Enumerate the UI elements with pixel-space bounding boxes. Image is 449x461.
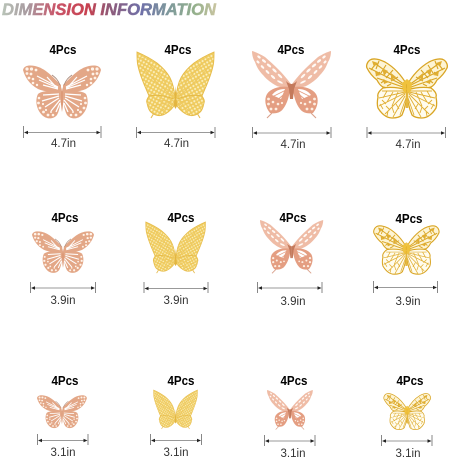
row 3 quantity labels: 4Pcs [396, 373, 424, 388]
row 3 quantity labels: 4Pcs [280, 373, 308, 388]
measure: row 2 column 2 [144, 282, 208, 307]
measure: row 1 column 3 [252, 127, 331, 151]
measure: row 2 column 4: 3.9in [396, 296, 420, 308]
row 1 quantity labels: 4Pcs [50, 42, 76, 57]
measure: row 2 column 1: 3.9in [51, 295, 75, 307]
butterfly: large rose [23, 65, 101, 118]
butterfly: medium rose swallowtail [260, 220, 323, 273]
butterfly: large rose swallowtail [252, 51, 331, 118]
row 2 quantity labels: 4Pcs [52, 210, 78, 225]
measure: row 1 column 1: 4.7in [51, 138, 76, 150]
measure: row 3 column 3 [264, 435, 315, 460]
measure: row 1 column 2: 4.7in [164, 138, 189, 150]
measure: row 3 column 2: 3.1in [164, 447, 188, 459]
row 3 quantity labels: 4Pcs [168, 373, 194, 388]
row 2 quantity labels: 4Pcs [396, 211, 422, 226]
butterfly: small rose swallowtail [267, 390, 313, 430]
measure: row 2 column 2: 3.9in [164, 295, 188, 307]
row 3 quantity labels: 4Pcs [52, 373, 78, 388]
measure: row 1 column 2 [136, 127, 215, 150]
measure: row 3 column 1 [38, 434, 88, 459]
measure: row 1 column 1 [24, 126, 101, 150]
butterfly: small rose [37, 395, 87, 428]
measure: row 1 column 4: 4.7in [396, 139, 420, 151]
butterfly: large gold open-work [367, 59, 447, 118]
measure: row 2 column 1 [30, 282, 96, 307]
butterfly: medium gold 3D [146, 222, 205, 273]
row 1 quantity labels: 4Pcs [394, 42, 420, 57]
row 1 quantity labels: 4Pcs [164, 42, 192, 57]
butterfly: medium gold open-work [374, 226, 439, 274]
measure: row 3 column 2 [150, 434, 202, 459]
measure: row 3 column 1: 3.1in [51, 447, 75, 459]
measure: row 1 column 4 [367, 127, 446, 151]
measure: row 3 column 4 [382, 435, 432, 460]
row 1 quantity labels: 4Pcs [278, 42, 304, 57]
row 1 quantity labels [50, 42, 420, 57]
measure: row 3 column 4: 3.1in [396, 448, 420, 460]
row 2 quantity labels [52, 210, 422, 226]
measure: row 2 column 3: 3.9in [281, 296, 305, 308]
measure: row 2 column 3 [258, 282, 322, 308]
measure: row 3 column 3: 3.1in [281, 448, 305, 460]
measure: row 2 column 4 [374, 281, 438, 308]
butterfly: small gold 3D [154, 390, 197, 429]
butterfly: small gold open-work [384, 394, 431, 430]
butterfly: medium rose [32, 231, 94, 273]
title: DIMENSION INFORMATION [2, 1, 217, 19]
measure: row 1 column 3: 4.7in [281, 139, 305, 151]
row 2 quantity labels: 4Pcs [168, 210, 194, 225]
butterfly: large gold 3D [137, 52, 214, 118]
row 2 quantity labels: 4Pcs [280, 210, 306, 225]
row 3 quantity labels [52, 373, 424, 388]
